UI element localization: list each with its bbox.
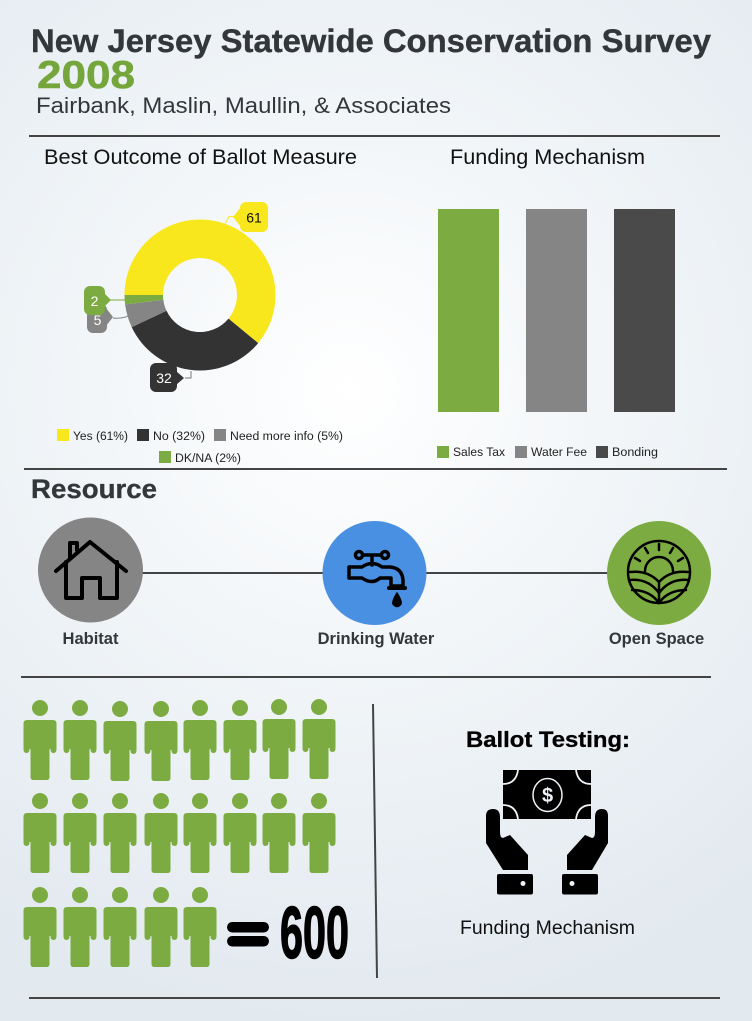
pictogram: people equals 600: [24, 699, 349, 974]
heading: best outcome: Best Outcome of Ballot Measure: [44, 146, 357, 169]
callout: 5: [87, 304, 128, 333]
icon: faucet: [349, 552, 405, 606]
legend: donut: Need more info (5%): [230, 429, 343, 443]
title: New Jersey Statewide Conservation Survey: [31, 23, 711, 59]
item: drinking water: Drinking Water: [318, 630, 435, 648]
caption: funding mechanism: Funding Mechanism: [460, 918, 635, 939]
year: 2008: [37, 54, 135, 97]
heading: ballot testing: Ballot Testing:: [466, 727, 630, 752]
panel: resource: [31, 474, 711, 648]
panel: best outcome donut: [44, 146, 357, 465]
heading: funding mechanism: Funding Mechanism: [450, 146, 645, 169]
icon: sun and fields: [628, 541, 690, 603]
legend: donut: [57, 429, 343, 465]
item: drinking water: [318, 521, 435, 648]
panel: ballot testing: [460, 727, 635, 939]
callout: 2: [84, 286, 125, 315]
item: open space: [607, 521, 711, 648]
people row 1: [24, 699, 336, 781]
header: [31, 23, 711, 118]
item: habitat: Habitat: [63, 630, 119, 648]
legend: funding: [437, 445, 658, 459]
callout: 32: 32: [156, 370, 172, 386]
item: habitat: [38, 518, 143, 648]
legend: donut: Yes (61%): [73, 429, 128, 443]
equals sign: [227, 922, 269, 946]
legend: funding: Water Fee: [531, 445, 587, 459]
callout: 61: [225, 202, 268, 232]
icon: hands holding money: [486, 770, 608, 894]
icon: house: [56, 542, 126, 598]
item: open space: Open Space: [609, 630, 704, 648]
legend: funding: Sales Tax: [453, 445, 506, 459]
legend: donut: No (32%): [153, 429, 205, 443]
heading: resource: Resource: [31, 474, 157, 504]
callout: 5: 5: [94, 312, 102, 328]
icon: hands holding money: $: [542, 785, 553, 807]
callout: 32: [150, 363, 191, 392]
callout: 2: 2: [91, 293, 99, 309]
legend: funding: Bonding: [612, 445, 658, 459]
donut chart: [124, 220, 276, 370]
subtitle: Fairbank, Maslin, Maullin, & Associates: [36, 93, 451, 118]
callout: 61: 61: [246, 210, 262, 226]
legend: donut: DK/NA (2%): [175, 451, 241, 465]
people row 2: [24, 793, 336, 873]
number 600: 600: [280, 893, 349, 974]
people row 3: [24, 887, 216, 967]
bar chart: [438, 209, 675, 412]
panel: funding mechanism chart: [437, 146, 675, 459]
